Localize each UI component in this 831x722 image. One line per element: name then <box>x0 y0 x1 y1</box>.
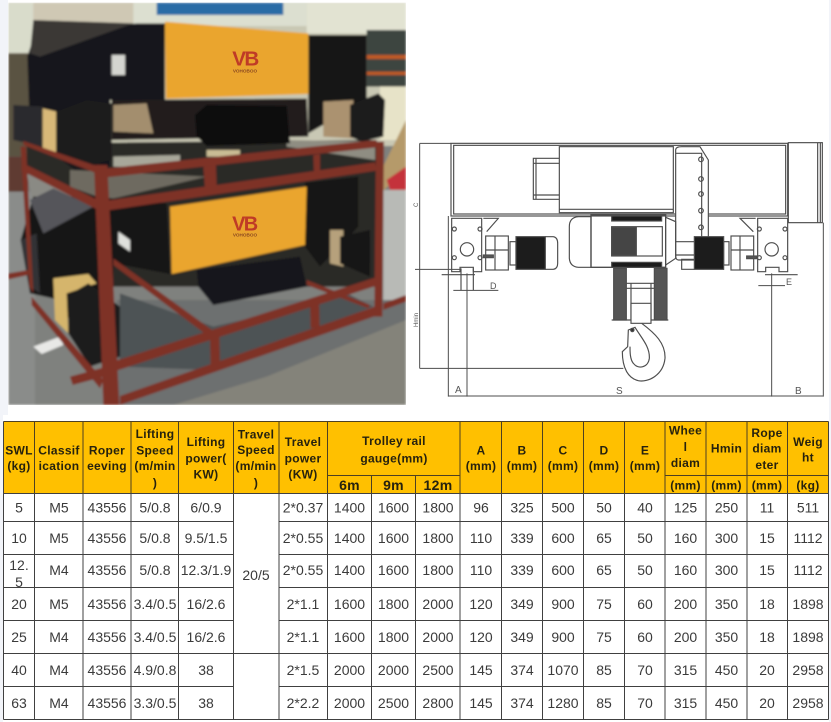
row: 12.5 kg: 12.3/1.9 <box>181 562 232 578</box>
table header <box>4 422 828 494</box>
row: 10 kg: 110 <box>470 530 492 546</box>
technical drawing of the hoist <box>415 143 823 397</box>
table header: Travel <box>285 435 321 449</box>
row: 10 kg: 2*0.55 <box>283 530 323 546</box>
table header: A <box>477 444 486 458</box>
row: 40 kg: 2958 <box>792 662 824 678</box>
table header: (mm) <box>711 478 742 492</box>
row: 5 kg: 325 <box>510 500 534 516</box>
row: 5 kg <box>15 500 819 516</box>
row: 12.5 kg: 160 <box>674 562 697 578</box>
table header: 12m <box>424 477 452 493</box>
table header: (kg) <box>7 459 31 473</box>
merged travel speed cell: 20/5 <box>242 567 270 583</box>
row: 5 kg: 1600 <box>378 500 409 516</box>
table header: 6m <box>339 477 360 493</box>
table header: (mm) <box>548 459 578 473</box>
row: 5 kg: 5/0.8 <box>139 500 171 516</box>
row: 63 kg: 450 <box>715 695 738 711</box>
row: 10 kg: 43556 <box>88 530 127 546</box>
row: 25 kg: 120 <box>469 629 493 645</box>
row: 40 kg: 2500 <box>422 662 454 678</box>
row: 25 kg: 350 <box>715 629 738 645</box>
row: 20 kg: 1898 <box>792 596 824 612</box>
table header: (mm) <box>670 478 701 492</box>
drawing: central motor <box>569 215 676 267</box>
row: 5 kg: 43556 <box>88 500 127 516</box>
row: 5 kg: 96 <box>473 500 489 516</box>
table header: l <box>684 440 687 454</box>
table header: Hmin <box>711 442 742 456</box>
row: 63 kg: 1280 <box>547 695 579 711</box>
row: 40 kg: 145 <box>469 662 493 678</box>
row: 63 kg: 70 <box>637 695 653 711</box>
table header: Whee <box>669 424 702 438</box>
row: 63 kg <box>11 695 824 711</box>
row: 40 kg: 2*1.5 <box>287 662 320 678</box>
row: 20 kg: 43556 <box>88 596 127 612</box>
top hoist <box>27 23 165 170</box>
table header: ) <box>153 476 157 490</box>
row: 5 kg: 5 <box>15 500 23 516</box>
row: 5 kg: 2*0.37 <box>283 500 323 516</box>
row: 10 kg: 1112 <box>793 530 823 546</box>
row: 40 kg: 40 <box>11 662 27 678</box>
row: 12.5 kg: 12. <box>9 557 29 573</box>
table header: Travel <box>238 428 274 442</box>
row: 5 kg: 1800 <box>422 500 454 516</box>
row: 20 kg: 349 <box>510 596 534 612</box>
row: 63 kg: 20 <box>759 695 775 711</box>
table header: D <box>600 444 609 458</box>
row: 63 kg: 38 <box>198 695 214 711</box>
row: 25 kg: 60 <box>637 629 653 645</box>
logo: top hoist: VB <box>232 48 258 71</box>
row: 12.5 kg: 1400 <box>334 562 365 578</box>
row: 12.5 kg: M4 <box>49 562 69 578</box>
row: 25 kg: 1600 <box>334 629 365 645</box>
row: 40 kg: 4.9/0.8 <box>134 662 177 678</box>
row: 40 kg: 20 <box>759 662 775 678</box>
table header: Speed <box>237 443 275 457</box>
table header: Weig <box>793 435 823 449</box>
row: 5 kg: 511 <box>797 500 819 516</box>
row: 40 kg: 70 <box>637 662 653 678</box>
table header: gauge(mm) <box>360 452 428 466</box>
table header: Trolley rail <box>362 434 426 448</box>
row: 5 kg: 250 <box>715 500 738 516</box>
table header: ication <box>39 459 79 473</box>
dimension labels: B <box>795 386 802 397</box>
dimension labels: D <box>490 281 497 291</box>
drawing: right end carriage <box>682 218 798 275</box>
row: 12.5 kg: 5/0.8 <box>139 562 171 578</box>
bottom hoist <box>21 197 170 367</box>
row: 12.5 kg: 43556 <box>88 562 127 578</box>
drawing: left end carriage <box>442 218 558 290</box>
row: 5 kg: 11 <box>760 500 774 516</box>
photo: two packed hoists on a red frame <box>8 3 406 405</box>
row: 25 kg: 1898 <box>792 629 824 645</box>
table header: (mm) <box>466 459 496 473</box>
row: 63 kg: 315 <box>674 695 697 711</box>
row: 63 kg: 2800 <box>422 695 454 711</box>
row: 20 kg: 2*1.1 <box>287 596 320 612</box>
row: 12.5 kg: 1800 <box>422 562 454 578</box>
row: 40 kg: 85 <box>596 662 612 678</box>
row: 25 kg: 349 <box>510 629 534 645</box>
row: 20 kg: 60 <box>637 596 653 612</box>
table header: diam <box>752 442 782 456</box>
row: 25 kg: 2000 <box>422 629 454 645</box>
table header: eter <box>755 458 779 472</box>
drawing: dimension lines <box>415 143 823 397</box>
row: 5 kg: 50 <box>596 500 612 516</box>
row: 10 kg: 1400 <box>334 530 365 546</box>
row: 25 kg: 1800 <box>378 629 409 645</box>
row: 12.5 kg: 1112 <box>793 562 823 578</box>
table header: power <box>285 452 321 466</box>
row: 12.5 kg: 339 <box>510 562 534 578</box>
table header: Roper <box>89 444 125 458</box>
table header: (m/min <box>235 459 277 473</box>
row: 5 kg: 125 <box>674 500 697 516</box>
row: 10 kg: 65 <box>596 530 612 546</box>
row: 63 kg: 2500 <box>378 695 409 711</box>
row: 20 kg: 75 <box>596 596 612 612</box>
row: 10 kg: 600 <box>551 530 575 546</box>
table header: (KW) <box>288 468 318 482</box>
row: 20 kg: 120 <box>469 596 493 612</box>
row: 10 kg: 1600 <box>378 530 409 546</box>
row: 5 kg: M5 <box>49 500 69 516</box>
row: 20 kg: 3.4/0.5 <box>134 596 177 612</box>
row: 12.5 kg <box>9 557 823 590</box>
row: 20 kg <box>11 596 824 612</box>
row: 63 kg: 145 <box>469 695 493 711</box>
row: 12.5 kg: 50 <box>637 562 653 578</box>
row: 25 kg: 18 <box>759 629 775 645</box>
row: 10 kg: 300 <box>715 530 738 546</box>
row: 10 kg: 160 <box>674 530 697 546</box>
logo: bottom hoist: VOHOBOO <box>233 233 258 238</box>
row: 12.5 kg: 110 <box>470 562 492 578</box>
table header: diam <box>671 456 700 470</box>
row: 10 kg: 1800 <box>422 530 454 546</box>
table header: 9m <box>383 477 404 493</box>
row: 40 kg: 43556 <box>88 662 127 678</box>
row: 63 kg: 2958 <box>792 695 824 711</box>
row: 63 kg: 374 <box>510 695 534 711</box>
row: 40 kg: 374 <box>510 662 534 678</box>
row: 25 kg: 25 <box>11 629 27 645</box>
table header: ht <box>802 450 814 464</box>
row: 25 kg: 75 <box>596 629 612 645</box>
table header: eeving <box>87 459 127 473</box>
table header: (mm) <box>752 478 782 492</box>
row: 10 kg: 10 <box>11 530 27 546</box>
table header: SWL <box>5 444 33 458</box>
specification table <box>4 422 828 720</box>
table header: (mm) <box>630 459 660 473</box>
table header: Lifting <box>136 427 174 441</box>
row: 25 kg <box>11 629 824 645</box>
row: 10 kg: 50 <box>637 530 653 546</box>
row: 63 kg: 43556 <box>88 695 127 711</box>
row: 20 kg: 18 <box>759 596 775 612</box>
row: 25 kg: 900 <box>551 629 575 645</box>
dimension labels: Hmin <box>414 313 420 327</box>
drawing: top beam and housing <box>451 143 822 260</box>
row: 40 kg <box>11 662 824 678</box>
row: 12.5 kg: 600 <box>551 562 575 578</box>
row: 12.5 kg: 1600 <box>378 562 409 578</box>
row: 25 kg: 3.4/0.5 <box>134 629 177 645</box>
table header: Rope <box>751 426 783 440</box>
row: 20 kg: 16/2.6 <box>187 596 226 612</box>
table header: (kg) <box>796 478 820 492</box>
row: 12.5 kg: 300 <box>715 562 738 578</box>
table header: (mm) <box>507 459 537 473</box>
table header: (m/min <box>134 459 176 473</box>
table header: Lifting <box>187 435 225 449</box>
row: 25 kg: 43556 <box>88 629 127 645</box>
table grid <box>4 422 828 720</box>
row: 25 kg: 2*1.1 <box>287 629 320 645</box>
row: 20 kg: 200 <box>674 596 697 612</box>
row: 40 kg: 450 <box>715 662 738 678</box>
row: 12.5 kg: 65 <box>596 562 612 578</box>
row: 25 kg: M4 <box>49 629 69 645</box>
logo: top hoist: VOHOBOO <box>233 69 258 74</box>
dimension labels <box>414 202 802 397</box>
logo: bottom hoist: VB <box>232 214 258 236</box>
table header: Classif <box>38 444 80 458</box>
row: 10 kg <box>11 530 823 546</box>
dimension labels: S <box>616 386 623 397</box>
table header: B <box>518 444 527 458</box>
row: 10 kg: M5 <box>49 530 69 546</box>
dimension labels: A <box>455 385 462 396</box>
table header: (mm) <box>589 459 619 473</box>
row: 63 kg: 63 <box>11 695 27 711</box>
table header: power( <box>185 452 227 466</box>
row: 40 kg: 315 <box>674 662 697 678</box>
row: 20 kg: 350 <box>715 596 738 612</box>
row: 63 kg: 2*2.2 <box>287 695 320 711</box>
dark area between the two hoists <box>27 140 380 287</box>
row: 20 kg: 2000 <box>422 596 454 612</box>
row: 63 kg: M4 <box>49 695 69 711</box>
row: 63 kg: 2000 <box>334 695 365 711</box>
table header: KW) <box>194 468 218 482</box>
dimension labels: E <box>786 277 792 287</box>
row: 10 kg: 5/0.8 <box>139 530 171 546</box>
table header: E <box>641 444 649 458</box>
row: 40 kg: 38 <box>198 662 214 678</box>
row: 5 kg: 6/0.9 <box>190 500 222 516</box>
row: 20 kg: 1600 <box>334 596 365 612</box>
row: 20 kg: 900 <box>551 596 575 612</box>
row: 25 kg: 16/2.6 <box>187 629 226 645</box>
row: 12.5 kg: 15 <box>759 562 775 578</box>
table header: ) <box>254 476 258 490</box>
row: 63 kg: 3.3/0.5 <box>134 695 177 711</box>
red frame <box>8 140 406 405</box>
dimension labels: C <box>414 202 420 207</box>
drawing: hook block and hook <box>612 268 668 381</box>
row: 5 kg: 1400 <box>334 500 365 516</box>
row: 40 kg: 2000 <box>378 662 409 678</box>
table header: Speed <box>136 444 174 458</box>
row: 10 kg: 339 <box>510 530 534 546</box>
row: 12.5 kg: 2*0.55 <box>283 562 323 578</box>
row: 20 kg: 1800 <box>378 596 409 612</box>
row: 25 kg: 200 <box>674 629 697 645</box>
row: 12.5 kg: 5 <box>15 574 23 590</box>
row: 40 kg: M4 <box>49 662 69 678</box>
row: 63 kg: 85 <box>596 695 612 711</box>
row: 10 kg: 9.5/1.5 <box>185 530 228 546</box>
table header: C <box>559 444 568 458</box>
row: 5 kg: 500 <box>551 500 575 516</box>
row: 20 kg: M5 <box>49 596 69 612</box>
row: 40 kg: 1070 <box>547 662 579 678</box>
row: 20 kg: 20 <box>11 596 27 612</box>
row: 10 kg: 15 <box>759 530 775 546</box>
row: 5 kg: 40 <box>637 500 653 516</box>
row: 40 kg: 2000 <box>334 662 365 678</box>
